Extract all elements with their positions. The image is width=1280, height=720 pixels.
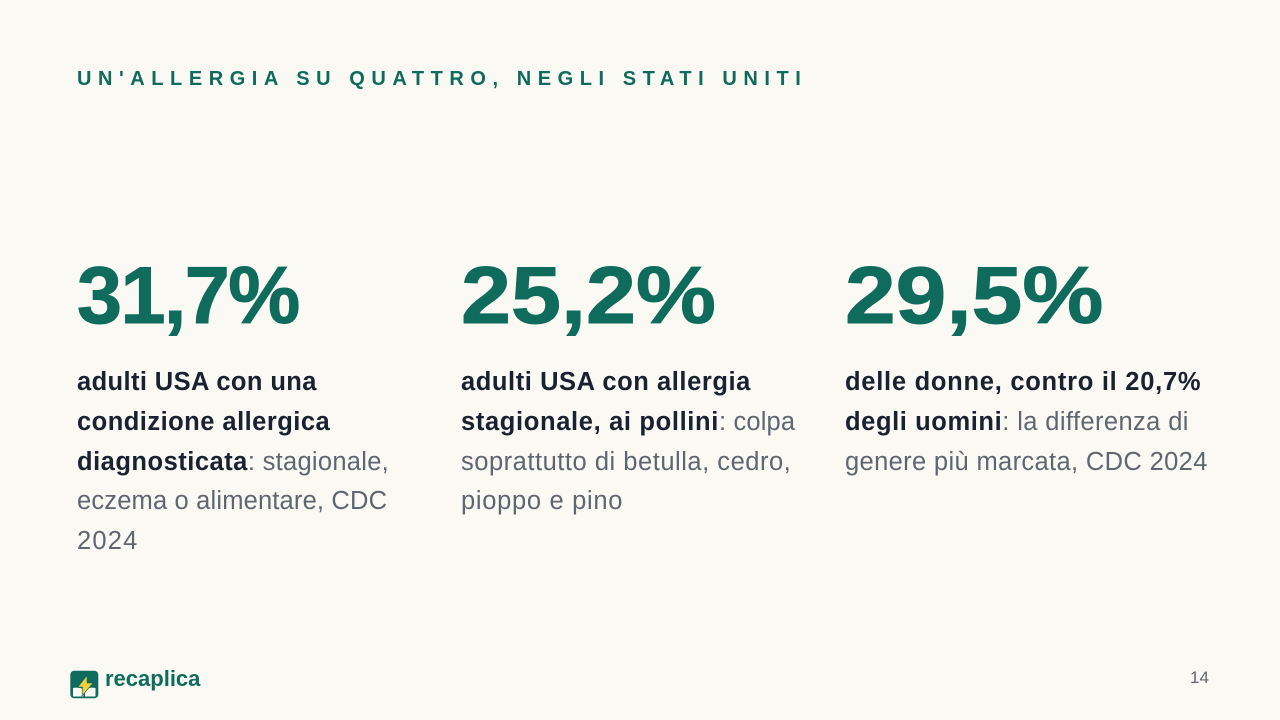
text block: gender difference bbox=[845, 368, 1208, 476]
title: UN'ALLERGIA SU QUATTRO, NEGLI STATI UNITI bbox=[77, 68, 807, 90]
text block: adults with allergic condition bbox=[77, 368, 389, 555]
icon: recaplica logo bbox=[70, 670, 98, 698]
text block: seasonal allergy bbox=[461, 368, 796, 515]
page number: 14 bbox=[1190, 668, 1209, 687]
text block: seasonal allergy: stagionale, ai pollini: colpa bbox=[461, 408, 795, 436]
text block: seasonal allergy: adulti USA con allergia bbox=[461, 368, 751, 396]
text block: adults with allergic condition: 2024 bbox=[77, 527, 139, 555]
text block: seasonal allergy: soprattutto di betulla, cedro, bbox=[461, 448, 791, 476]
statistic: 25,2%: 25,2% bbox=[461, 250, 716, 340]
text block: adults with allergic condition: condizione allergica bbox=[77, 408, 330, 436]
text block: adults with allergic condition: diagnosticata: stagionale, bbox=[77, 448, 389, 476]
text block: seasonal allergy: pioppo e pino bbox=[461, 487, 623, 515]
text block: gender difference: genere più marcata, CDC 2024 bbox=[845, 448, 1208, 476]
brand name: recaplica bbox=[105, 666, 200, 691]
statistic: 31,7%: 31,7% bbox=[77, 250, 299, 340]
text block: gender difference: delle donne, contro il 20,7% bbox=[845, 368, 1201, 396]
statistic: 29,5%: 29,5% bbox=[845, 250, 1103, 340]
text block: adults with allergic condition: adulti USA con una bbox=[77, 368, 317, 396]
text block: gender difference: degli uomini: la differenza di bbox=[845, 408, 1189, 436]
text block: adults with allergic condition: eczema o alimentare, CDC bbox=[77, 487, 387, 515]
